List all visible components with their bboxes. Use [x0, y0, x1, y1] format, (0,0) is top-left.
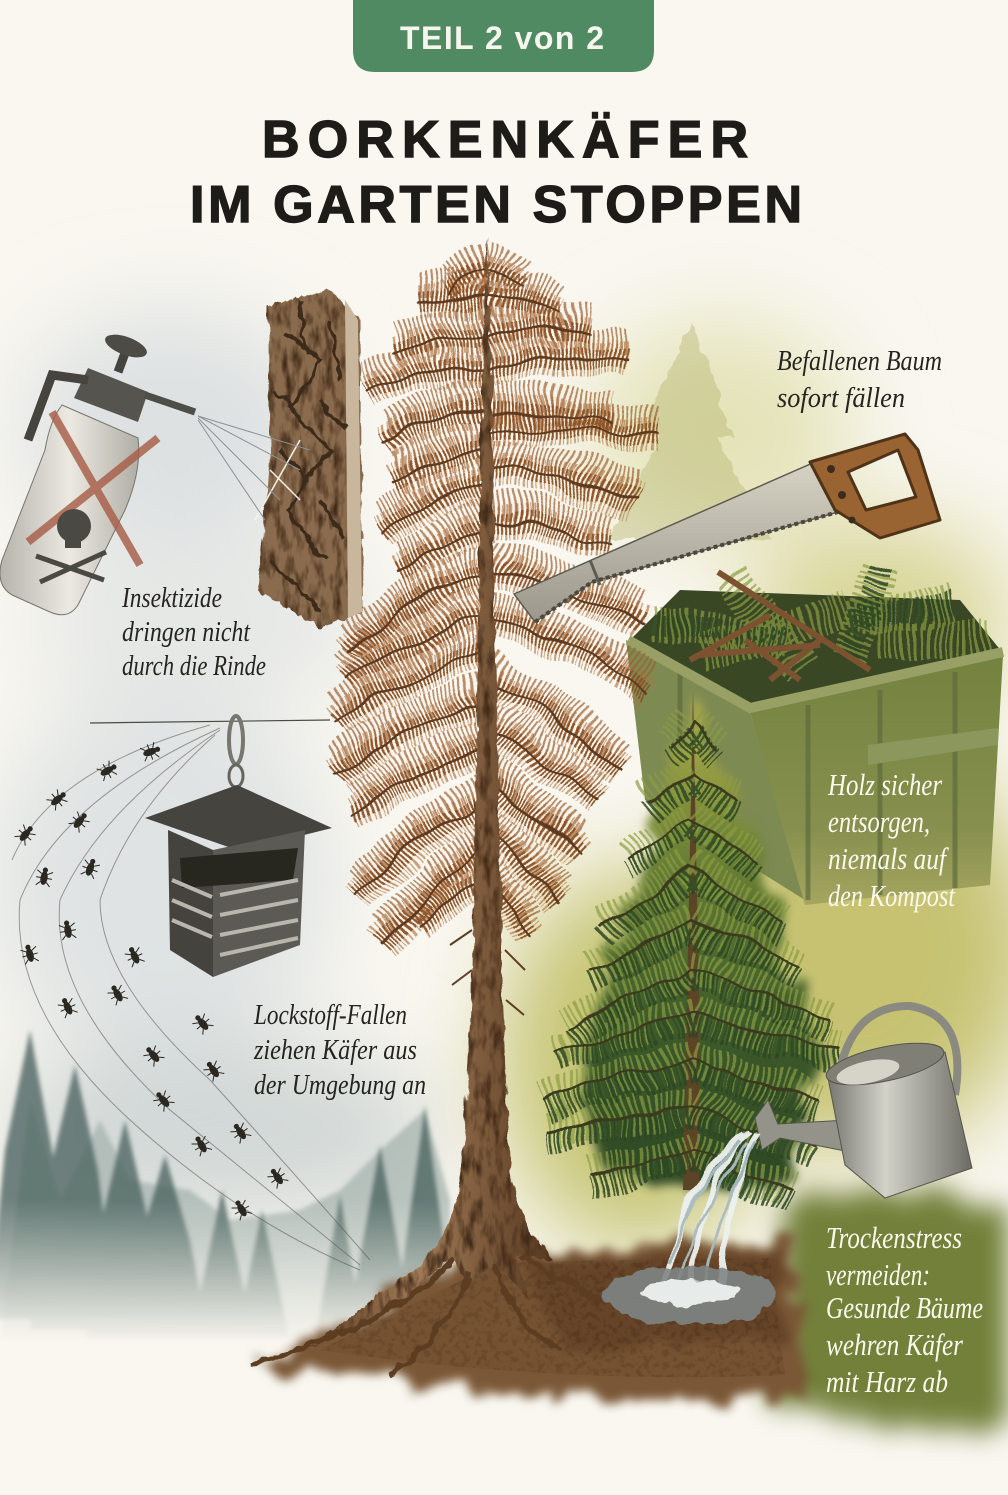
ground: soil and moss	[260, 1191, 1008, 1431]
spray lines	[198, 416, 310, 520]
background wash: misty blue-grey left	[0, 310, 440, 1220]
hanging chain	[229, 716, 243, 764]
can opening	[823, 1035, 947, 1093]
caption: avoid drought stress: wehren Käfer	[826, 1327, 964, 1362]
caption: dispose of wood: entsorgen,	[828, 804, 930, 839]
beetles	[140, 741, 163, 762]
lantern slats	[172, 880, 298, 955]
dumpster green cuttings	[650, 570, 990, 670]
icon: bark piece	[255, 290, 362, 628]
caption: fell the tree	[777, 345, 942, 414]
dumpster rim	[628, 640, 1003, 708]
caption: fell the tree: sofort fällen	[777, 382, 905, 414]
lower dead branch stubs	[450, 930, 525, 1015]
caption: lure traps	[253, 999, 426, 1101]
brown spruce foliage	[335, 253, 660, 945]
saw blade	[514, 462, 838, 622]
caption: avoid drought stress	[826, 1220, 983, 1399]
can handle	[838, 1006, 957, 1095]
lantern roof	[145, 785, 332, 851]
green spruce trunk	[683, 690, 699, 1190]
lantern left side	[168, 830, 213, 977]
dumpster left face	[626, 640, 805, 900]
saw rivets	[827, 465, 856, 524]
can inner lump	[834, 1055, 902, 1089]
caption: dispose of wood: den Kompost	[828, 878, 956, 913]
badge: part 2 of 2	[353, 0, 654, 72]
lantern inner bait	[180, 848, 298, 888]
can body	[828, 1052, 972, 1198]
icon: crossed-out spray bottle	[0, 330, 310, 615]
young green spruce	[545, 690, 840, 1202]
saw handle	[810, 434, 940, 538]
dumpster sticks	[690, 572, 870, 680]
caption: lure traps: Lockstoff-Fallen	[253, 999, 407, 1031]
caption: insecticides: dringen nicht	[122, 616, 251, 648]
distant forest	[0, 1030, 458, 1340]
dumpster handle bar	[868, 728, 998, 765]
green spruce foliage	[545, 720, 840, 1202]
caption: avoid drought stress: vermeiden:	[826, 1257, 930, 1292]
title: IM GARTEN STOPPEN	[190, 176, 802, 234]
badge: part 2 of 2: TEIL 2 von 2	[400, 20, 604, 56]
dumpster ribs	[680, 670, 955, 900]
dumpster with branches	[626, 570, 1003, 905]
dumpster right face	[750, 655, 1003, 905]
water puddle	[602, 1265, 778, 1325]
caption: dispose of wood	[827, 767, 956, 913]
lantern right side	[213, 830, 305, 977]
caption: dispose of wood: niemals auf	[828, 841, 950, 876]
nozzle	[145, 395, 195, 412]
flying beetles and trails	[12, 725, 370, 1270]
background tree: faint yellow-green	[610, 320, 770, 540]
caption: insecticides	[121, 582, 266, 682]
pump plunger	[118, 345, 128, 372]
caption: fell the tree: Befallenen Baum	[777, 345, 942, 377]
caption: avoid drought stress: mit Harz ab	[826, 1364, 948, 1399]
wire	[90, 720, 330, 723]
saw teeth	[535, 512, 838, 622]
caption: lure traps: ziehen Käfer aus	[253, 1034, 417, 1066]
icon: hand saw	[514, 434, 940, 622]
green spruce mass	[570, 690, 820, 1190]
icon: watering can with water	[602, 1006, 972, 1325]
title	[190, 111, 802, 234]
caption: lure traps: der Umgebung an	[254, 1069, 426, 1101]
red cross	[28, 412, 158, 565]
bottle pump head	[74, 368, 148, 422]
bottle handle	[28, 375, 88, 440]
flight trails	[12, 725, 370, 1270]
dead brown spruce	[250, 235, 660, 1375]
caption: dispose of wood: Holz sicher	[827, 767, 943, 802]
can spout	[755, 1100, 850, 1152]
title: BORKENKÄFER	[262, 111, 748, 169]
bottle body	[0, 405, 139, 615]
skull and crossbones	[36, 509, 106, 582]
icon: lure trap lantern	[90, 716, 332, 977]
saw ferrule	[590, 560, 600, 585]
caption: avoid drought stress: Trockenstress	[826, 1220, 962, 1255]
dumpster inner load	[628, 590, 1002, 706]
trunk and roots	[305, 235, 555, 1350]
background wash: yellow-green right	[500, 320, 1008, 1250]
caption: insecticides: Insektizide	[121, 582, 222, 614]
water stream	[662, 1128, 762, 1295]
caption: insecticides: durch die Rinde	[122, 650, 266, 682]
surface roots	[250, 1255, 640, 1375]
